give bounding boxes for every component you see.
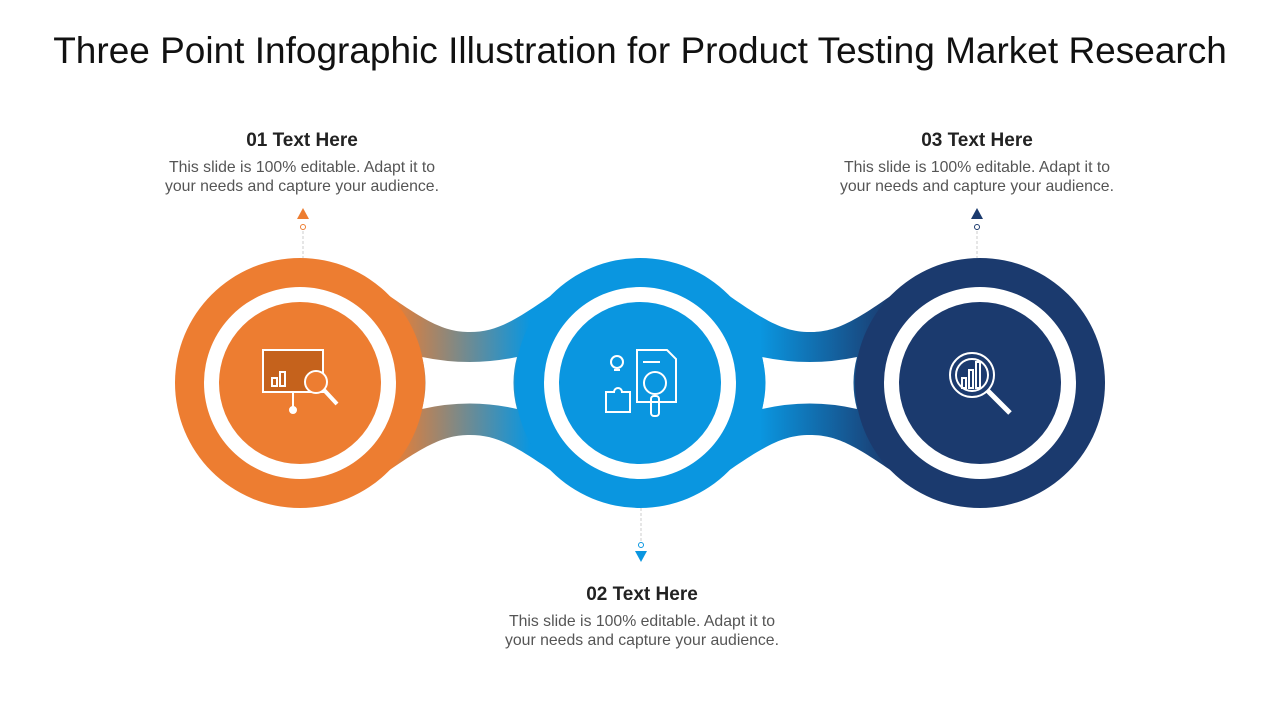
text block 03: This slide is 100% editable. Adapt it to (844, 159, 1110, 176)
text block 03: your needs and capture your audience. (840, 178, 1114, 195)
pointer 3 (971, 208, 983, 258)
text block 02: your needs and capture your audience. (505, 632, 779, 649)
text block 02: This slide is 100% editable. Adapt it to (509, 613, 775, 630)
circle 1 orange (175, 258, 425, 508)
text block 01: This slide is 100% editable. Adapt it to (169, 159, 435, 176)
pointer 1 (297, 208, 309, 258)
text block 01 (165, 130, 439, 195)
circle 3 navy (855, 258, 1105, 508)
circle 2 blue (515, 258, 765, 508)
title: Three Point Infographic Illustration for Product Testing Market Research (53, 30, 1227, 71)
text block 01: 01 Text Here (246, 130, 358, 151)
connector 2 (700, 275, 920, 491)
connector 1 (360, 275, 580, 491)
icon: document search bulb puzzle (606, 350, 676, 416)
text block 02 (505, 584, 779, 649)
text block 03: 03 Text Here (921, 130, 1033, 151)
icon: chart magnifier (950, 353, 1010, 413)
text block 01: your needs and capture your audience. (165, 178, 439, 195)
text block 02: 02 Text Here (586, 584, 698, 605)
text block 03 (840, 130, 1114, 195)
icon: presentation board (263, 350, 337, 413)
pointer 2 (635, 508, 647, 562)
